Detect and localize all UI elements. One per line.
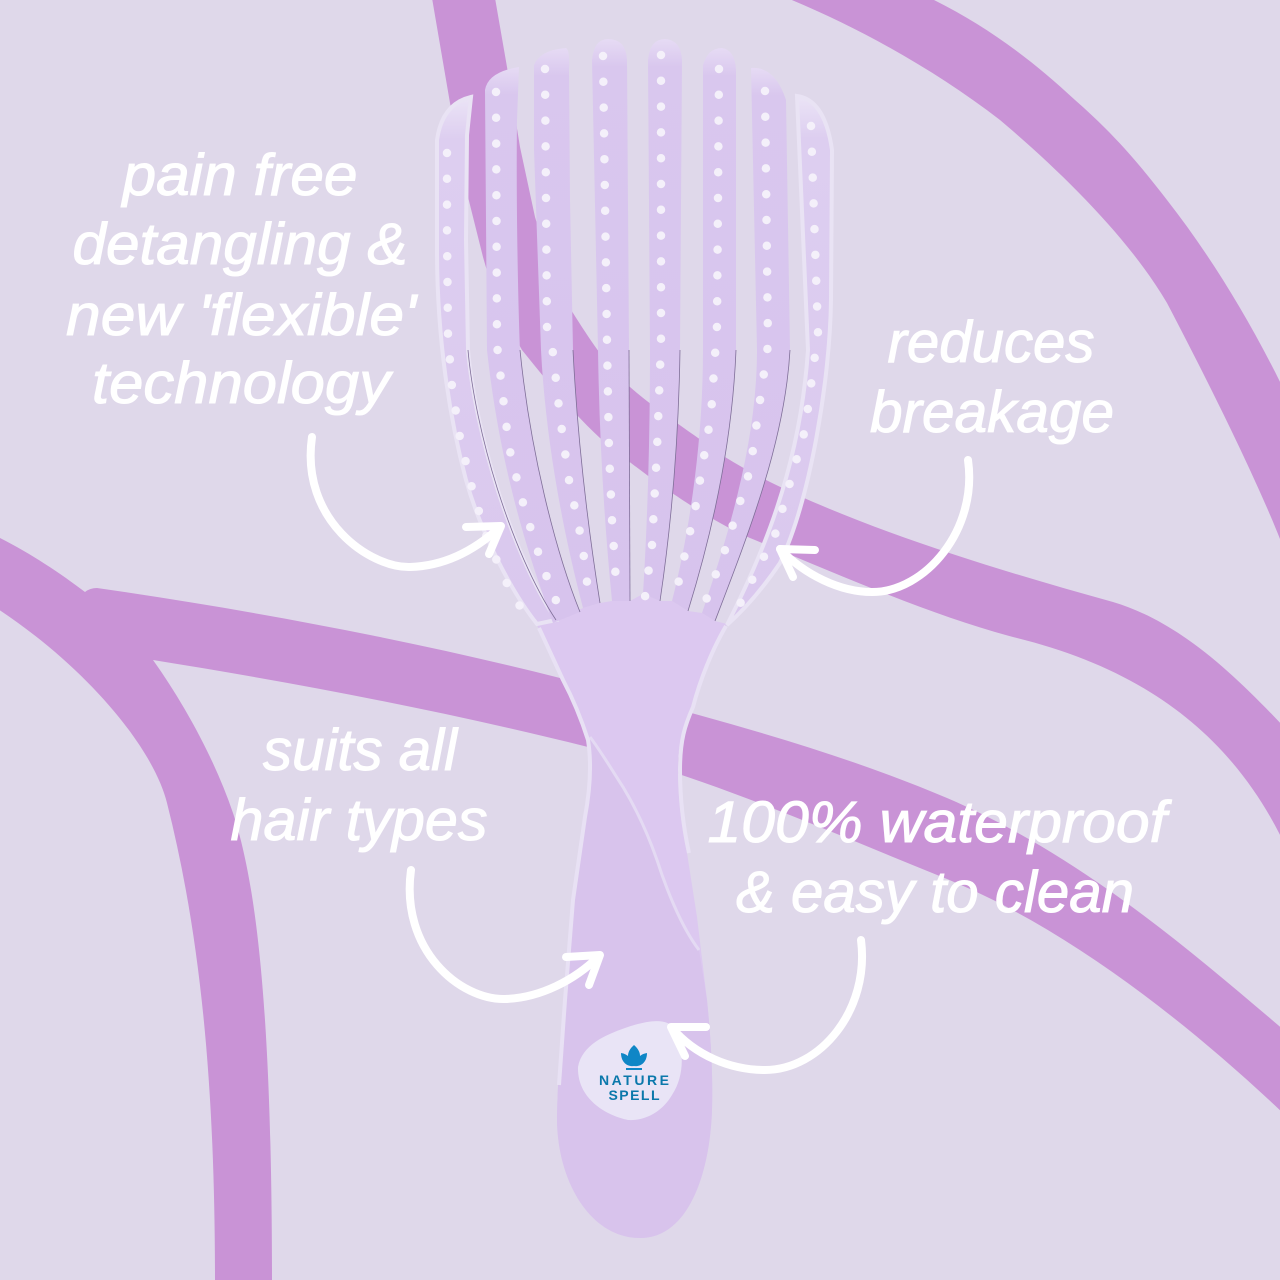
handle twist highlight xyxy=(590,737,699,950)
logo wordmark line two: SPELL xyxy=(608,1087,660,1103)
callout: pain free detangling: pain free xyxy=(120,143,358,208)
logo badge xyxy=(578,1021,682,1120)
brush handle and palm xyxy=(537,594,727,1238)
callout: suits all hair types xyxy=(230,718,488,853)
handle lower twist section xyxy=(557,737,712,1238)
tine 3 xyxy=(534,48,600,608)
bristles xyxy=(447,55,818,615)
arrow: to handle xyxy=(410,870,600,999)
callout: waterproof and easy to clean: & easy to clean xyxy=(736,860,1134,925)
icon: lotus leaves xyxy=(621,1045,647,1070)
tine 1 xyxy=(437,97,556,624)
arrow: to bristles left xyxy=(311,437,501,567)
callout: waterproof and easy to clean xyxy=(708,790,1173,925)
logo wordmark: NATURE xyxy=(599,1072,669,1088)
tine 6 xyxy=(672,48,736,611)
callout: waterproof and easy to clean: 100% waterproof xyxy=(708,790,1173,855)
tine 2 xyxy=(485,67,580,623)
callout: suits all hair types: hair types xyxy=(230,788,488,853)
callout: reduces breakage xyxy=(870,310,1114,445)
tine 8 xyxy=(727,96,832,625)
product: detangling brush xyxy=(437,39,832,1238)
badge blob xyxy=(578,1021,682,1120)
tine 7 xyxy=(702,68,790,621)
callout: pain free detangling xyxy=(66,143,418,416)
callout: pain free detangling: technology xyxy=(92,351,393,416)
tine edge lines xyxy=(468,350,790,621)
callout: pain free detangling: new 'flexible' xyxy=(66,283,418,348)
arrow: to logo xyxy=(671,940,862,1070)
handle edge highlights xyxy=(539,626,726,1085)
tine 4 xyxy=(592,39,630,601)
callout: pain free detangling: detangling & xyxy=(72,212,408,277)
callout: reduces breakage: breakage xyxy=(870,380,1114,445)
arrow: to bristles right xyxy=(780,460,969,592)
callout: reduces breakage: reduces xyxy=(888,310,1094,375)
tine 5 xyxy=(643,39,682,601)
callout: suits all hair types: suits all xyxy=(263,718,459,783)
